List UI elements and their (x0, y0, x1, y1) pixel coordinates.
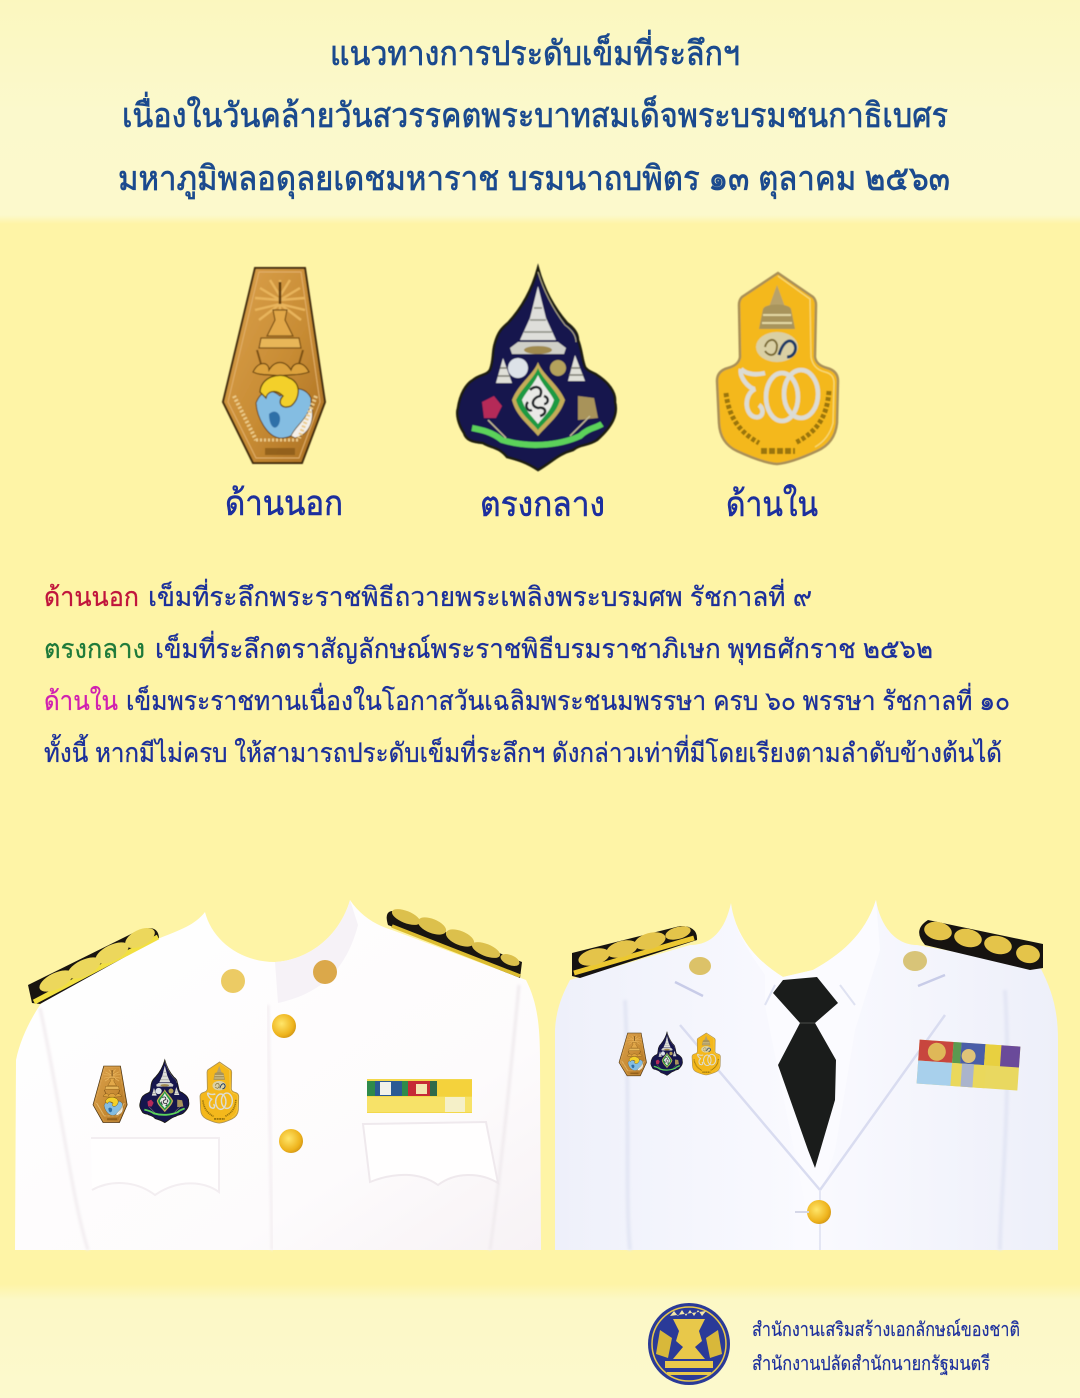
badge: outer pin (large) (223, 268, 325, 463)
text block: explanation: ด้านใน (44, 686, 118, 716)
badge: inner pin (large) (717, 273, 838, 464)
text block: explanation: ตรงกลาง (44, 634, 145, 664)
footer text: agency names (752, 1318, 1020, 1375)
logo: office seal (648, 1303, 730, 1385)
text block: explanation: ทั้งนี้ หากมีไม่ครบ ให้สามารถประดับเข็มที่ระลึกฯ ดังกล่าวเท่าที่มีโดยเรียงตามลำดับข้างต้นได้ (44, 734, 1002, 768)
right pocket flap (363, 1122, 498, 1185)
badge labels (225, 484, 818, 524)
black tie (773, 977, 838, 1168)
uniform: white mandarin-collar tunic (15, 900, 541, 1250)
footer text: agency names: สำนักงานเสริมสร้างเอกลักษณ์ของชาติ (752, 1318, 1020, 1341)
text block: explanation: ด้านนอก (44, 582, 139, 612)
panel: header band (0, 0, 1080, 224)
small pins (93, 1060, 239, 1123)
epaulette: right (919, 919, 1043, 970)
text block: explanation (44, 579, 1010, 768)
small pins (619, 1032, 720, 1076)
ribbon bar (367, 1079, 472, 1113)
epaulette: right (387, 906, 522, 978)
footer text: agency names: สำนักงานปลัดสำนักนายกรัฐมนตรี (752, 1353, 990, 1375)
epaulette: left (572, 924, 697, 978)
title: มหาภูมิพลอดุลยเดชมหาราช บรมนาถบพิตร ๑๓ ตุลาคม ๒๕๖๓ (118, 160, 950, 199)
text block: explanation: เข็มที่ระลึกพระราชพิธีถวายพระเพลิงพระบรมศพ รัชกาลที่ ๙ (148, 579, 812, 612)
badge labels: ด้านใน (726, 484, 818, 524)
title: เนื่องในวันคล้ายวันสวรรคตพระบาทสมเด็จพระบรมชนกาธิเบศร (122, 92, 948, 135)
left pocket flap (91, 1138, 219, 1195)
badge labels: ตรงกลาง (480, 485, 605, 524)
uniform: white jacket with black tie (555, 900, 1058, 1250)
collar pins and buttons (221, 960, 337, 1153)
title: แนวทางการประดับเข็มที่ระลึกฯ (330, 30, 740, 73)
text block: explanation: เข็มที่ระลึกตราสัญลักษณ์พระราชพิธีบรมราชาภิเษก พุทธศักราช ๒๕๖๒ (155, 631, 933, 665)
badge labels: ด้านนอก (225, 484, 343, 523)
title (118, 30, 950, 199)
badge: centre pin (large) (457, 268, 616, 470)
epaulette: left (28, 924, 159, 1004)
panel: footer band (0, 1284, 1080, 1398)
ribbon bar (917, 1040, 1020, 1091)
text block: explanation: เข็มพระราชทานเนื่องในโอกาสวันเฉลิมพระชนมพรรษา ครบ ๖๐ พรรษา รัชกาลที่ ๑๐ (126, 683, 1010, 716)
lapel pins and button (689, 951, 927, 1224)
